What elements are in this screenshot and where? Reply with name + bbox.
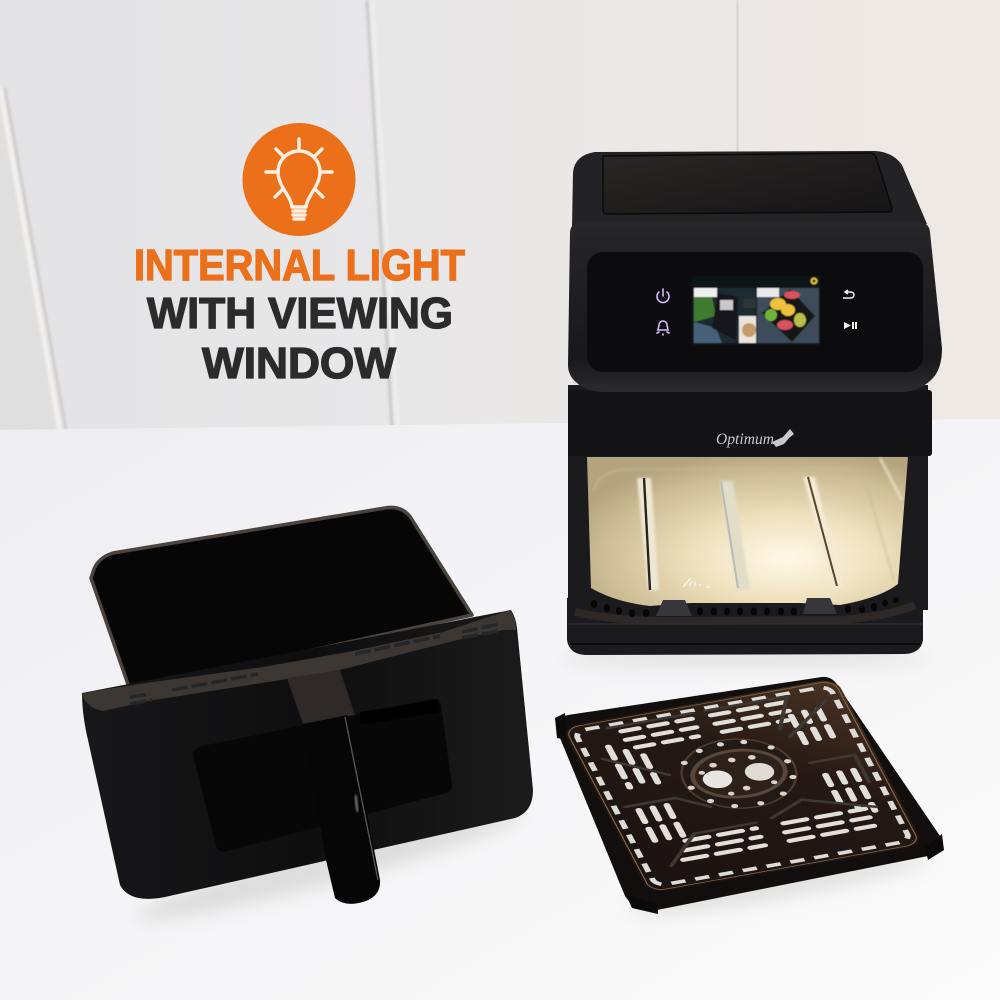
viewing window with lit interior — [587, 457, 908, 606]
heading: with viewing: WITH VIEWING — [147, 290, 453, 338]
tray clips — [555, 713, 944, 914]
tray central ring — [667, 731, 811, 816]
heading: internal light: INTERNAL LIGHT — [134, 242, 465, 290]
air fryer lower band — [568, 390, 932, 456]
soft shadows on table — [132, 650, 930, 934]
air fryer main unit — [567, 151, 942, 655]
tray ribs — [585, 690, 892, 868]
heading: window: WINDOW — [202, 340, 397, 388]
pan marking — [683, 578, 710, 587]
brand logo — [716, 429, 794, 448]
tray edge — [557, 677, 940, 910]
basket front face — [82, 610, 533, 899]
air fryer top housing — [572, 151, 927, 228]
fryer basket — [82, 507, 533, 904]
air fryer base with vent holes — [567, 586, 923, 655]
sector slots — [599, 697, 882, 863]
basket viewing panel — [193, 699, 452, 851]
brand logo: Optimum — [716, 431, 774, 448]
basket handle — [287, 670, 380, 904]
control icons left: power and light — [657, 289, 669, 335]
background: kitchen wall — [0, 0, 1000, 430]
tray rails — [637, 477, 842, 590]
touch screen — [692, 276, 820, 345]
crisper tray — [555, 677, 944, 914]
control icons right: back and play pause — [843, 290, 857, 329]
air fryer front panel — [568, 222, 942, 392]
tray plate with slots — [561, 678, 924, 894]
perimeter slots — [574, 686, 911, 886]
basket interior — [91, 507, 472, 690]
background: white table top — [0, 419, 1000, 1000]
basket rim with vents — [82, 610, 516, 711]
icon: orange circle with light bulb — [242, 123, 356, 236]
air fryer body pillars — [568, 385, 928, 610]
